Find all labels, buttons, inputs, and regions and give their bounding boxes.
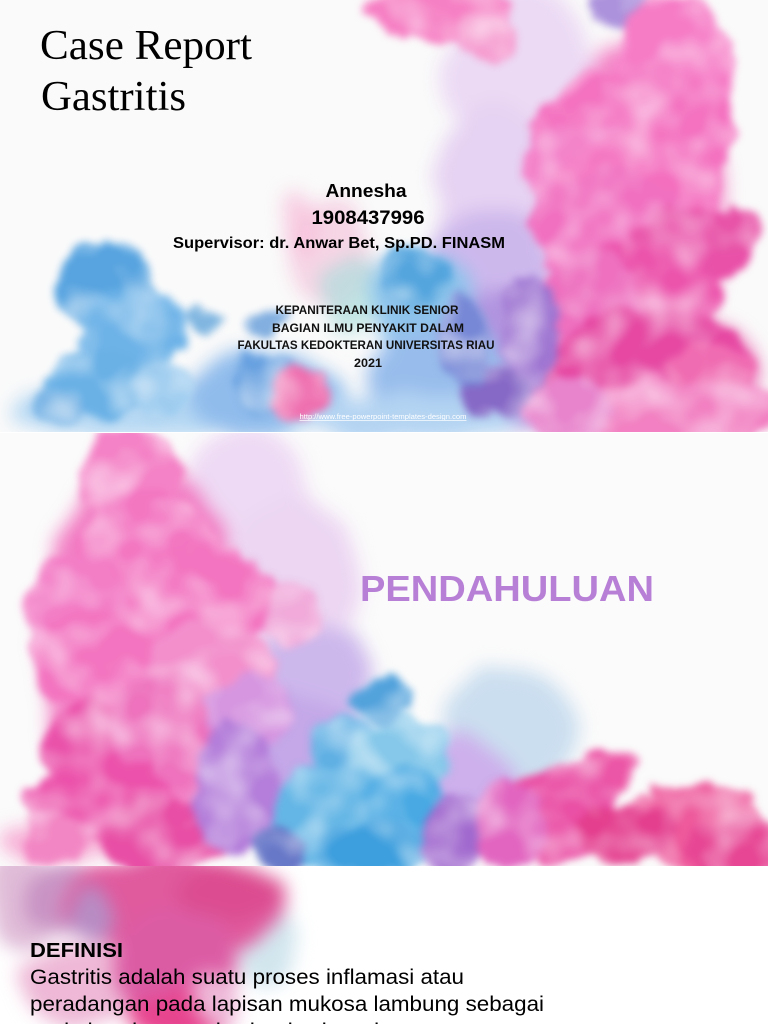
text block: institution: 2021 [354, 358, 383, 370]
text block: institution: BAGIAN ILMU PENYAKIT DALAM [272, 323, 464, 335]
smoke illustration: definition cloud [0, 850, 298, 1024]
panel: title slide [0, 0, 768, 444]
purple core [500, 275, 560, 385]
pink centre bottom [270, 366, 326, 418]
main pink column [618, 0, 740, 102]
text block: author and supervisor: Supervisor: dr. Anwar Bet, Sp.PD. FINASM [173, 235, 505, 252]
text block: author and supervisor [173, 181, 505, 252]
text block: definition: peradangan pada lapisan mukosa lambung sebagai [30, 993, 544, 1016]
smoke illustration: section clouds [0, 425, 768, 880]
heading: title: Case Report [40, 23, 252, 69]
heading: title [40, 23, 252, 120]
text block: definition [30, 940, 544, 1024]
text block: definition: DEFINISI [30, 940, 123, 962]
panel: section slide [0, 425, 768, 880]
text block: institution [238, 305, 494, 370]
text block: definition: Gastritis adalah suatu proses inflamasi atau [30, 966, 464, 989]
top pink [368, 0, 512, 44]
panel: definition slide [0, 866, 542, 1024]
footer link text: http://www.free-powerpoint-templates-design.com [300, 414, 467, 421]
blue centre [380, 247, 460, 303]
blue [355, 676, 415, 724]
heading: title: Gastritis [41, 74, 186, 120]
text block: author and supervisor: 1908437996 [312, 208, 424, 229]
blue left cluster [50, 243, 150, 327]
text block: institution: FAKULTAS KEDOKTERAN UNIVERSITAS RIAU [238, 340, 494, 352]
right pink [580, 744, 640, 796]
text block: author and supervisor: Annesha [326, 181, 408, 201]
smoke illustration: pink, lilac and blue ink clouds [15, 0, 768, 444]
text block: institution: KEPANITERAAN KLINIK SENIOR [276, 305, 459, 317]
heading: section title: PENDAHULUAN [360, 568, 654, 609]
